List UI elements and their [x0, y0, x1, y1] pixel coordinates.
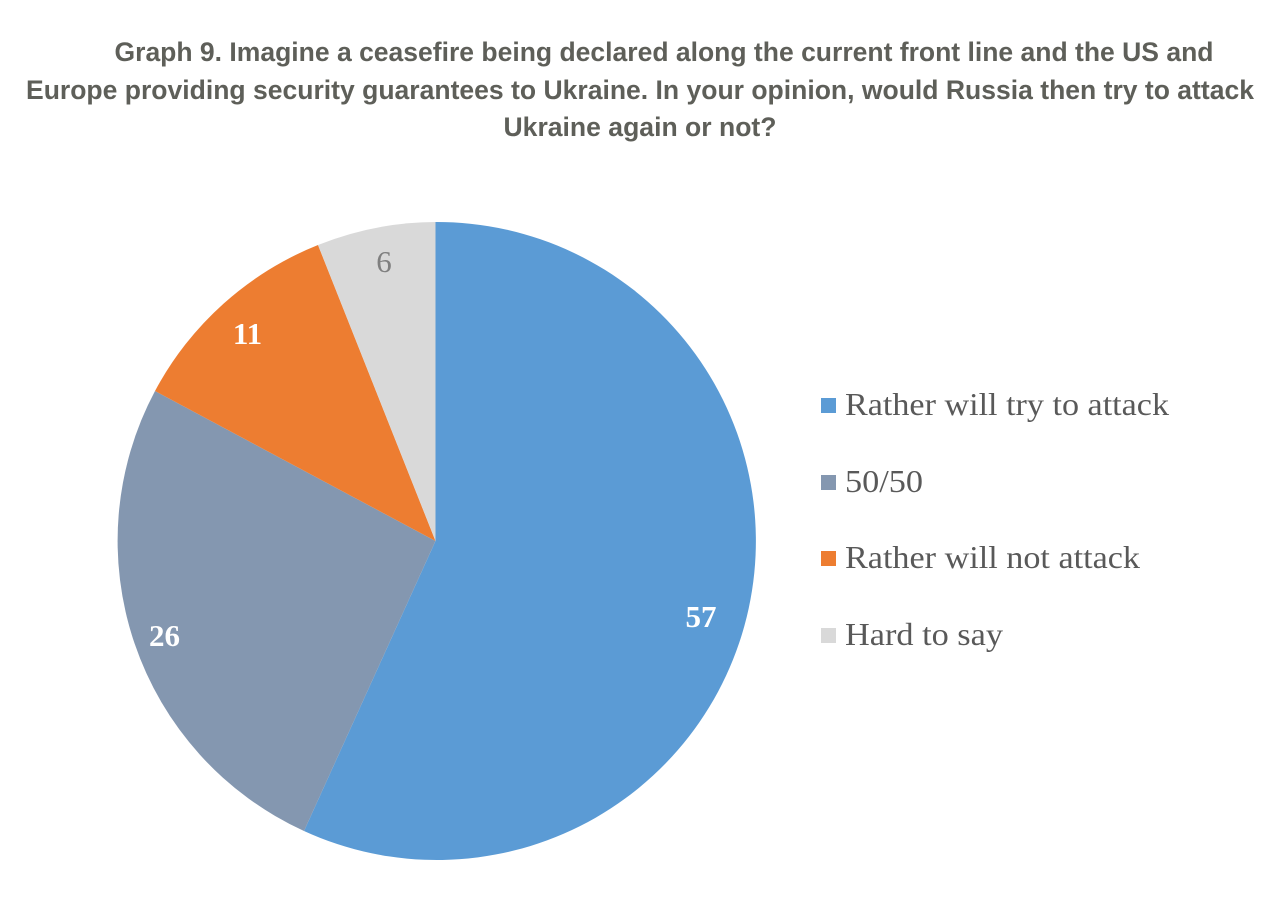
legend — [821, 386, 1169, 652]
legend item: rather will try to attack: Rather will try to attack — [845, 386, 1169, 422]
legend item: hard to say: Hard to say — [845, 616, 1003, 652]
value label: 6: 6 — [376, 244, 392, 279]
value label: 11: 11 — [233, 316, 262, 351]
slice: rather will not attack 11 — [155, 245, 436, 541]
slice: rather will try to attack 57 — [304, 222, 756, 860]
legend item: rather will not attack: Rather will not attack — [845, 539, 1140, 575]
value label: 26: 26 — [149, 618, 180, 653]
slice: 50/50 26 — [118, 391, 436, 831]
title: Europe providing security guarantees to Ukraine. In your opinion, would Russia then try to attack — [26, 75, 1254, 105]
value label: 57: 57 — [686, 599, 716, 634]
legend item: 50/50: 50/50 — [845, 463, 923, 499]
slice: hard to say 6 — [318, 222, 436, 541]
title: Ukraine again or not? — [504, 112, 776, 142]
title — [26, 37, 1254, 142]
title: Graph 9. Imagine a ceasefire being declared along the current front line and the US and — [114, 37, 1214, 67]
pie chart — [118, 222, 756, 860]
